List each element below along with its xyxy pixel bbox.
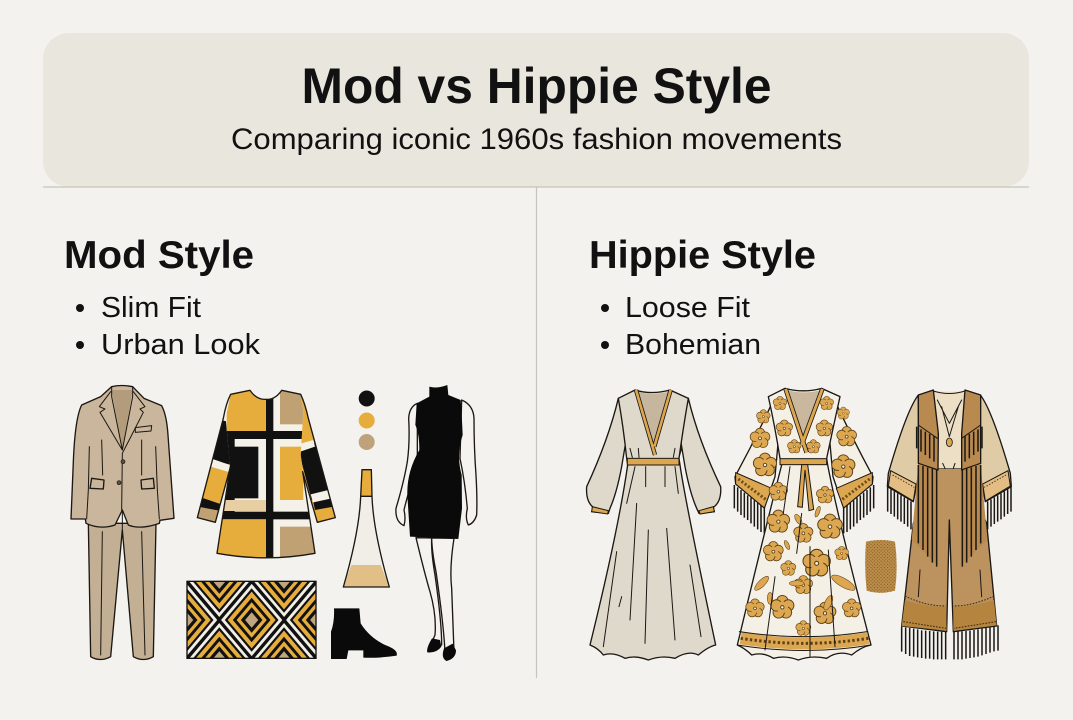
icon: black ankle boot [331, 608, 397, 659]
bullet list: mod traits: Slim Fit [101, 292, 201, 324]
panel: hippie style [587, 234, 1011, 660]
icon: fringed vest and trousers [887, 390, 1011, 659]
icon: beige suit [71, 385, 174, 659]
icon: geometric diamond pattern swatch [186, 580, 317, 659]
icon: plain cream maxi dress [587, 390, 721, 660]
icon: mannequin in black dress [396, 385, 477, 661]
icon: woven texture swatch [865, 540, 897, 593]
icon: flared trouser leg [343, 470, 389, 587]
title: Mod vs Hippie Style [302, 58, 772, 114]
bullet list: mod traits: Urban Look [101, 329, 261, 361]
heading: hippie style: Hippie Style [589, 234, 816, 277]
bullet list: mod traits [76, 292, 261, 361]
bullet list: hippie traits: Loose Fit [625, 292, 750, 324]
header panel [43, 33, 1029, 187]
subtitle: Comparing iconic 1960s fashion movements [231, 123, 842, 156]
panel: mod style [64, 234, 477, 700]
heading: mod style: Mod Style [64, 234, 254, 277]
icon: colour-block coat dress [193, 388, 340, 562]
icon: colour swatches [359, 390, 375, 450]
bullet list: hippie traits: Bohemian [625, 329, 761, 361]
bullet list: hippie traits [601, 292, 761, 361]
icon: floral kimono dress [734, 388, 874, 660]
